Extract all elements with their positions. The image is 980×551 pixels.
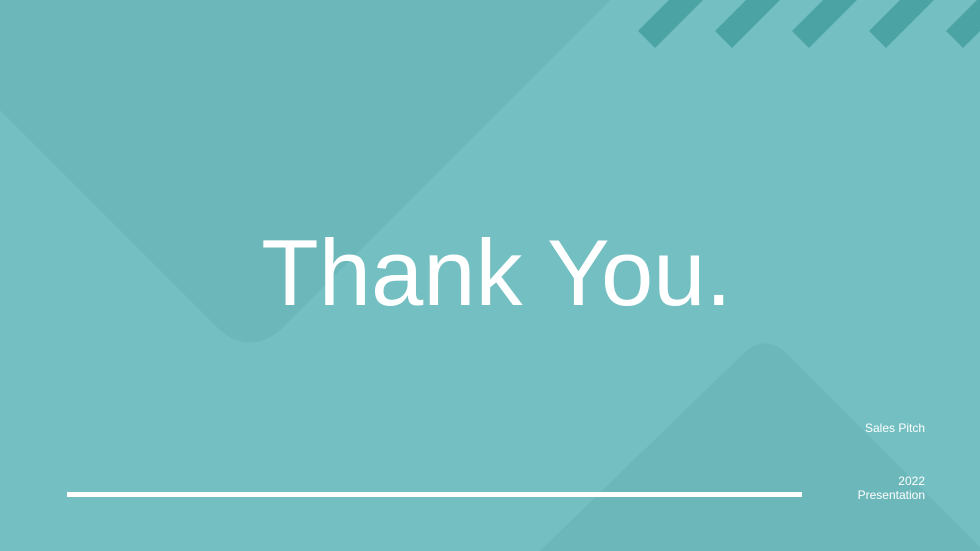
subtitle: sales pitch: Sales Pitch (865, 421, 925, 435)
subtitle: 2022 presentation: Presentation (858, 488, 925, 502)
decorative stripes top-right (638, 0, 980, 48)
title: Thank You. (261, 220, 732, 325)
divider line (67, 492, 802, 497)
subtitle: 2022 presentation: 2022 (898, 474, 925, 488)
subtitle: 2022 presentation (858, 474, 925, 502)
